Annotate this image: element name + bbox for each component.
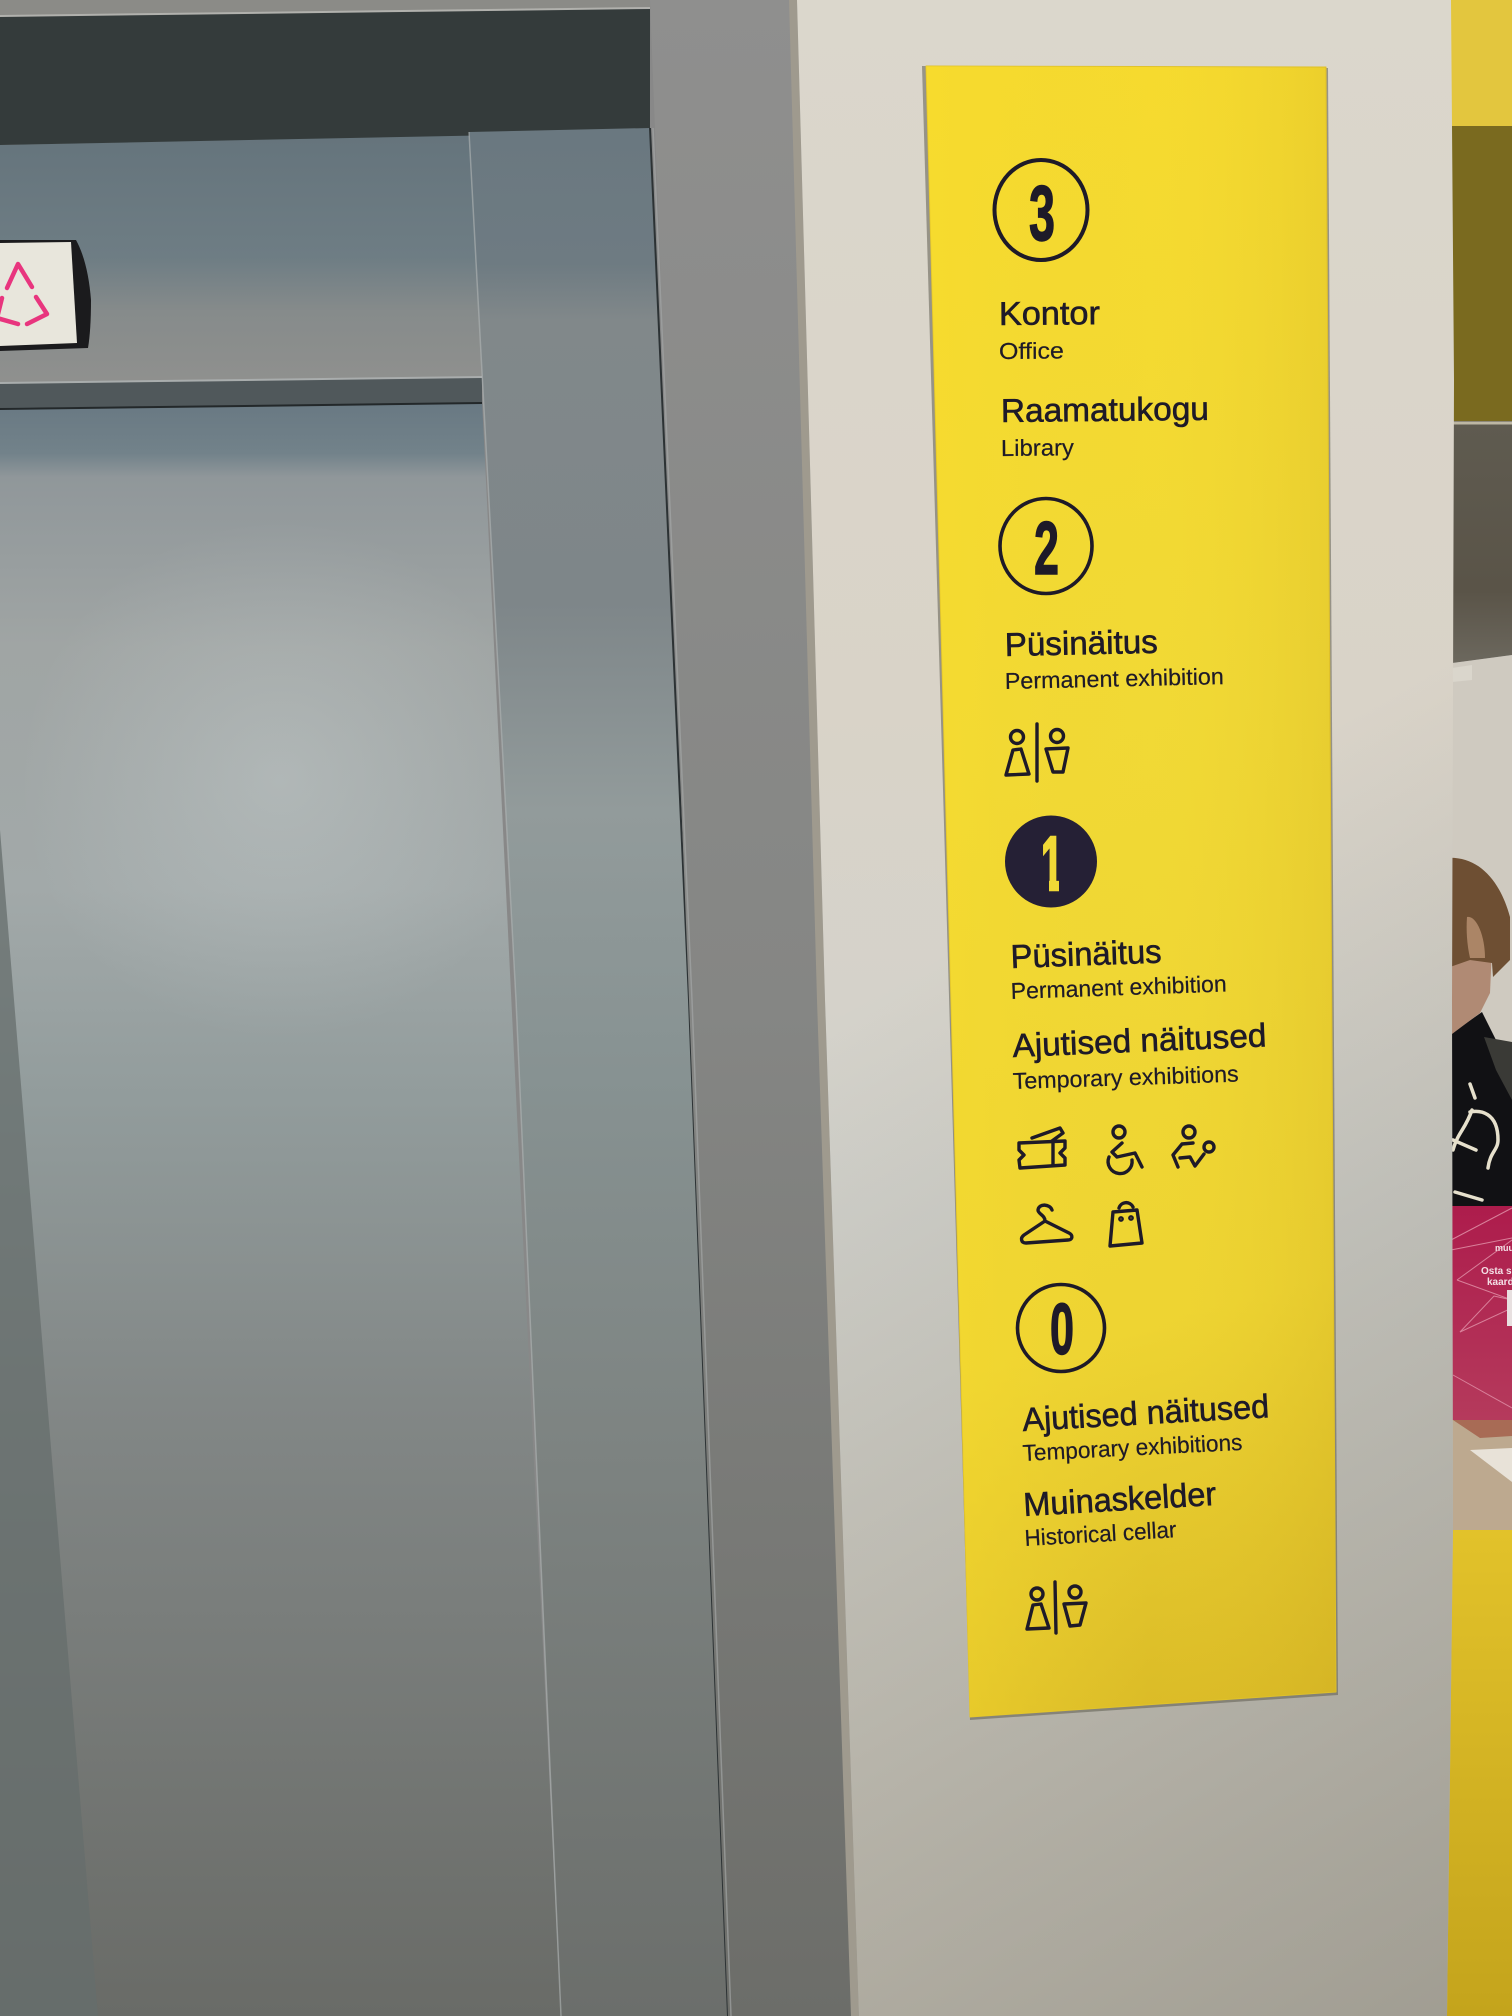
floor 1: permanent exhibition: Permanent exhibition <box>1010 970 1227 1004</box>
floor 1: permanent exhibition <box>1010 932 1227 1004</box>
icon: restrooms, floor 0 <box>1027 1582 1086 1633</box>
floor 0 badge <box>1018 1284 1104 1372</box>
person behind the wall <box>1445 858 1512 1210</box>
floor 3: library <box>1001 390 1209 461</box>
floor 3 badge: 3 <box>1029 169 1055 257</box>
desk and lower yellow wall <box>1445 1420 1512 2016</box>
floor 2 badge: 2 <box>1034 506 1059 590</box>
floor 0: historical cellar: Muinaskelder <box>1022 1475 1217 1523</box>
yellow floor directory sign <box>922 66 1338 1720</box>
elevator label plate with pink symbol <box>0 240 91 351</box>
floor 3: library: Raamatukogu <box>1001 390 1209 429</box>
floor 3: office <box>999 294 1100 364</box>
icon: museum shop bag <box>1110 1203 1142 1246</box>
floor 1: temporary exhibitions: Ajutised näitused <box>1012 1016 1267 1064</box>
floor 1 badge: 1 <box>1041 821 1063 907</box>
sign board <box>922 66 1338 1720</box>
poster on the desk <box>1445 1206 1512 1420</box>
icon: tickets <box>1019 1128 1065 1168</box>
floor 1: permanent exhibition: Püsinäitus <box>1010 932 1162 975</box>
floor 1: temporary exhibitions <box>1012 1016 1267 1094</box>
floor 0: temporary exhibitions: Ajutised näitused <box>1021 1387 1270 1438</box>
floor 2 badge <box>1000 498 1092 594</box>
elevator door: lower panel <box>0 400 561 2016</box>
icon: baby changing <box>1173 1126 1214 1167</box>
door pillar <box>469 128 728 2016</box>
floor 2: permanent exhibition <box>1004 623 1224 694</box>
floor 0: historical cellar: Historical cellar <box>1024 1516 1177 1551</box>
floor 3: office: Kontor <box>999 294 1100 332</box>
floor 0: temporary exhibitions: Temporary exhibitions <box>1022 1429 1243 1466</box>
floor 2: permanent exhibition: Püsinäitus <box>1004 623 1158 663</box>
floor 1 badge <box>1005 816 1097 908</box>
floor 0 badge: 0 <box>1050 1290 1074 1370</box>
elevator door: upper panel <box>0 135 482 409</box>
floor 0: temporary exhibitions <box>1021 1387 1270 1466</box>
floor 3 badge <box>994 160 1088 260</box>
door frame <box>650 0 859 2016</box>
icon: wheelchair access <box>1108 1126 1142 1174</box>
door header: dark lintel <box>0 0 650 145</box>
icon: restrooms, floor 2 <box>1006 724 1068 781</box>
floor 3: office: Office <box>999 337 1064 364</box>
floor 0: historical cellar <box>1022 1475 1217 1551</box>
floor 1: temporary exhibitions: Temporary exhibitions <box>1012 1061 1239 1094</box>
floor 2: permanent exhibition: Permanent exhibition <box>1005 663 1224 694</box>
wall surface <box>797 0 1454 2016</box>
floor 3: library: Library <box>1001 434 1075 461</box>
background right of wall: yellow shelf, grey shelf, wall <box>1445 0 1512 1224</box>
icon: cloakroom hanger <box>1022 1205 1072 1243</box>
